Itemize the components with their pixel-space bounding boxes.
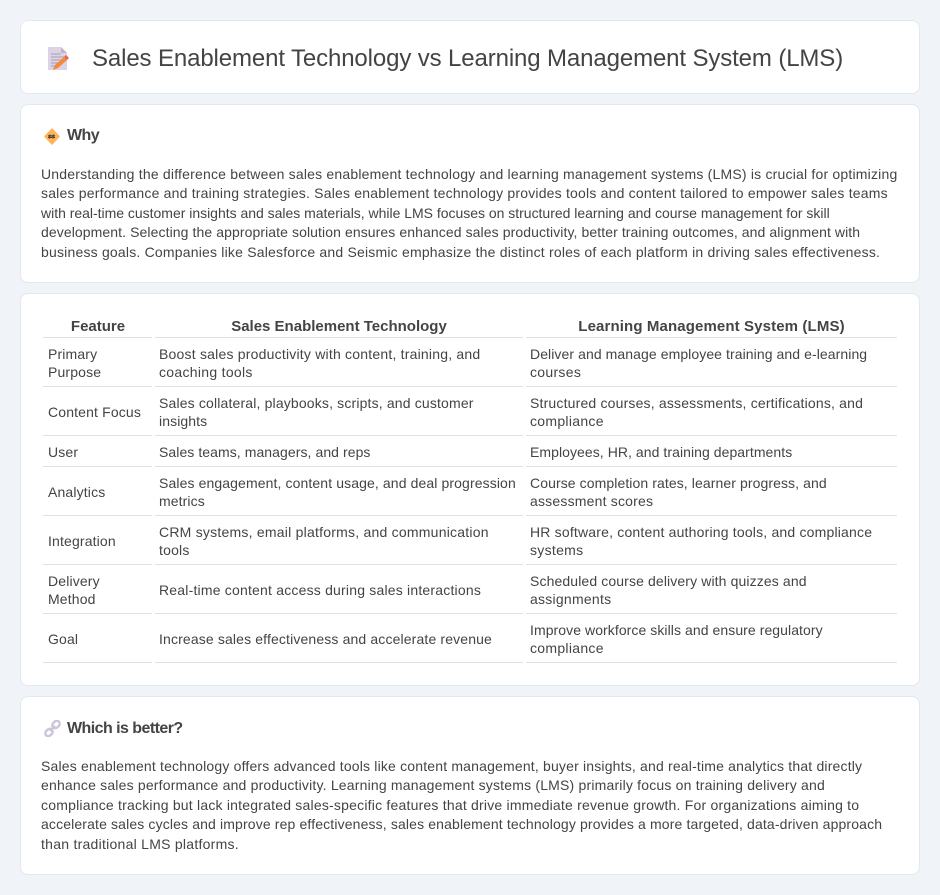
text block: which is better paragraph: accelerate sales cycles and improve rep effectiveness, sales enablement technology provides a more targeted, data-driven approach: [41, 816, 882, 832]
row: delivery method: Scheduled course delivery with quizzes and: [530, 573, 807, 589]
text block: which is better paragraph: enhance sales performance and productivity. Learning management systems (LMS) primarily focus on training delivery and: [41, 777, 825, 793]
table header: feature: Feature: [71, 318, 125, 335]
text block: why paragraph: with real-time customer insights and sales materials, while LMS focuses on structured learning and course management for skill: [41, 205, 830, 221]
row: integration: CRM systems, email platforms, and communication: [159, 524, 489, 540]
row: content focus: [48, 395, 863, 429]
row: user: Employees, HR, and training departments: [530, 444, 792, 460]
row: integration: HR software, content authoring tools, and compliance: [530, 524, 872, 540]
row: primary purpose: [48, 346, 867, 380]
row: content focus: Structured courses, assessments, certifications, and: [530, 395, 863, 411]
row: delivery method: Real-time content access during sales interactions: [159, 582, 481, 598]
row: content focus: insights: [159, 413, 207, 429]
row: analytics: metrics: [159, 493, 205, 509]
row: content focus: compliance: [530, 413, 604, 429]
row: integration: Integration: [48, 533, 116, 549]
row: integration: tools: [159, 542, 190, 558]
text block: why paragraph: Understanding the difference between sales enablement technology and learning management systems (LMS) is crucial for optimizing: [41, 166, 897, 182]
heading: why: Why: [67, 127, 99, 144]
row: primary purpose: Deliver and manage employee training and e-learning: [530, 346, 867, 362]
text block: why paragraph: [41, 166, 897, 260]
table header: sales enablement technology: Sales Enablement Technology: [231, 318, 447, 335]
row: primary purpose: Boost sales productivity with content, training, and: [159, 346, 480, 362]
row: analytics: [48, 475, 827, 509]
row: delivery method: assignments: [530, 591, 611, 607]
row: content focus: Sales collateral, playbooks, scripts, and customer: [159, 395, 474, 411]
text block: which is better paragraph: compliance tracking but lack integrated sales-specific features that drive immediate revenue growth. For organizations aiming to: [41, 797, 859, 813]
row: content focus: Content Focus: [48, 404, 141, 420]
row: primary purpose: courses: [530, 364, 581, 380]
row: primary purpose: Purpose: [48, 364, 101, 380]
row: goal: [48, 622, 823, 656]
table header: learning management system: Learning Management System (LMS): [578, 318, 845, 335]
row: primary purpose: coaching tools: [159, 364, 253, 380]
row: integration: [48, 524, 872, 558]
text block: which is better paragraph: than traditional LMS platforms.: [41, 836, 239, 852]
row: analytics: Sales engagement, content usage, and deal progression: [159, 475, 516, 491]
panel: which is better card: [20, 696, 920, 875]
row: goal: Increase sales effectiveness and accelerate revenue: [159, 631, 492, 647]
row: delivery method: Method: [48, 591, 96, 607]
row: user: [48, 444, 792, 460]
panel: title card: [20, 20, 920, 94]
row: delivery method: [48, 573, 807, 607]
row: integration: systems: [530, 542, 583, 558]
text block: why paragraph: business goals. Companies like Salesforce and Seismic emphasize the distinct roles of each platform in driving sales effectiveness.: [41, 244, 880, 260]
row: goal: Improve workforce skills and ensure regulatory: [530, 622, 823, 638]
text block: why paragraph: sales performance and training strategies. Sales enablement technology provides tools and content tailored to empower sales teams: [41, 185, 888, 201]
row: user: Sales teams, managers, and reps: [159, 444, 370, 460]
row: primary purpose: Primary: [48, 346, 97, 362]
row: user: User: [48, 444, 78, 460]
text block: which is better paragraph: Sales enablement technology offers advanced tools like content management, buyer insights, and real-time analytics that directly: [41, 758, 862, 774]
title: Sales Enablement Technology vs Learning Management System (LMS): [92, 45, 843, 72]
icon: chain link: [44, 720, 61, 737]
row: analytics: assessment scores: [530, 493, 653, 509]
row: delivery method: Delivery: [48, 573, 100, 589]
row: goal: compliance: [530, 640, 604, 656]
panel: why card: [20, 104, 920, 283]
heading: which is better: Which is better?: [67, 720, 183, 737]
row: goal: Goal: [48, 631, 78, 647]
icon: document with pencil: [48, 47, 69, 70]
text block: why paragraph: development. Selecting the appropriate solution ensures enhanced sales productivity, better training outcomes, and alignment with: [41, 224, 860, 240]
row: analytics: Analytics: [48, 484, 105, 500]
panel: comparison table card: [20, 293, 920, 686]
icon: orange diamond: [44, 128, 60, 145]
text block: which is better paragraph: [41, 758, 882, 852]
row: analytics: Course completion rates, learner progress, and: [530, 475, 827, 491]
